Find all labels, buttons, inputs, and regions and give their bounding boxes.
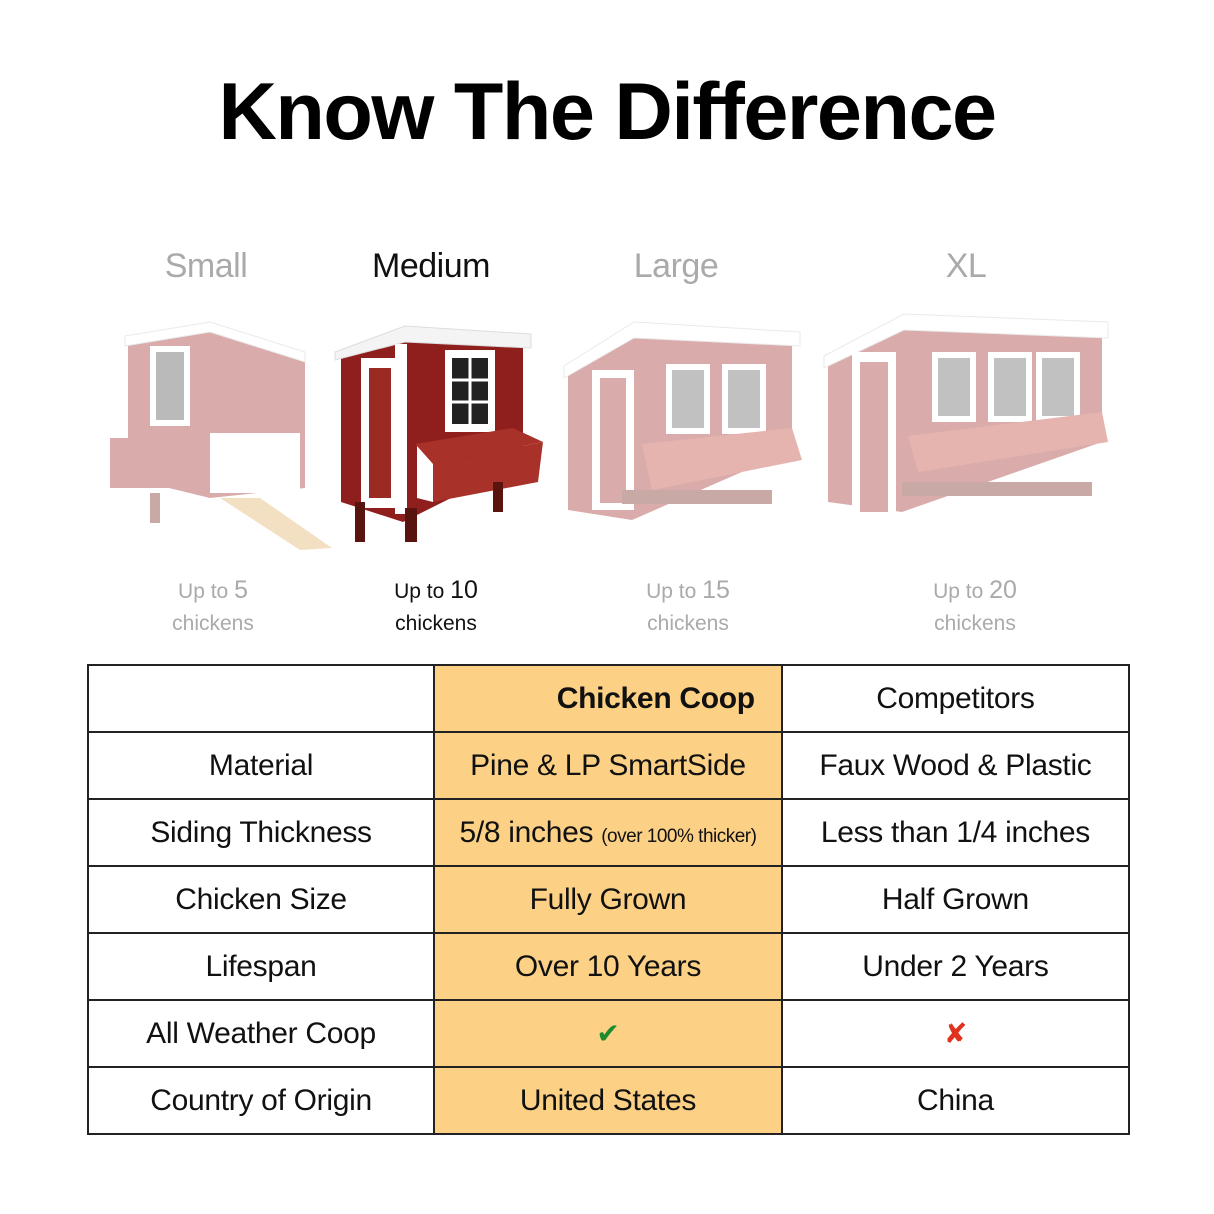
coop: medium [334, 326, 543, 542]
comparison table: Faux Wood & Plastic [819, 748, 1092, 782]
label: Small: Small [165, 247, 247, 285]
comparison table: ✘ [944, 1018, 967, 1049]
comparison table: Lifespan [206, 950, 317, 982]
comparison table: Country of Origin [150, 1084, 372, 1116]
comparison table: Material [209, 748, 313, 782]
caption: large [646, 576, 730, 635]
comparison table: China [917, 1084, 994, 1116]
caption: small: chickens [172, 612, 254, 635]
comparison table: Under 2 Years [862, 950, 1049, 982]
caption: small: Up to 5 [178, 576, 248, 604]
caption: XL: Up to 20 [933, 576, 1017, 604]
label: Large: Large [634, 247, 718, 285]
caption: medium [394, 576, 478, 635]
comparison table: Competitors [876, 682, 1035, 714]
caption: XL: chickens [934, 612, 1016, 635]
coop: large [564, 322, 802, 520]
comparison table: ✔ [596, 1018, 620, 1049]
comparison table: All Weather Coop [146, 1016, 376, 1050]
comparison table: Pine & LP SmartSide [470, 748, 746, 782]
caption: medium: chickens [395, 612, 477, 635]
comparison table: Over 10 Years [515, 950, 701, 982]
caption: medium: Up to 10 [394, 576, 478, 604]
comparison table: Less than 1/4 inches [821, 816, 1090, 848]
comparison table: Fully Grown [530, 882, 686, 916]
caption: small [172, 576, 254, 635]
label: XL: XL [946, 247, 986, 285]
caption: large: Up to 15 [646, 576, 730, 604]
comparison table: 5/8 inches (over 100% thicker) [459, 816, 756, 848]
comparison table: United States [520, 1084, 696, 1116]
coop: small [110, 322, 332, 550]
caption: XL [933, 576, 1017, 635]
label: Medium: Medium [372, 247, 490, 285]
comparison table: Chicken Size [175, 882, 347, 916]
comparison table: Chicken Coop [557, 682, 755, 714]
caption: large: chickens [647, 612, 729, 635]
comparison table [87, 664, 1130, 1135]
comparison table: Half Grown [882, 882, 1029, 916]
title: Know The Difference [218, 67, 996, 157]
coop: XL [824, 314, 1108, 512]
comparison table: Siding Thickness [150, 816, 372, 848]
